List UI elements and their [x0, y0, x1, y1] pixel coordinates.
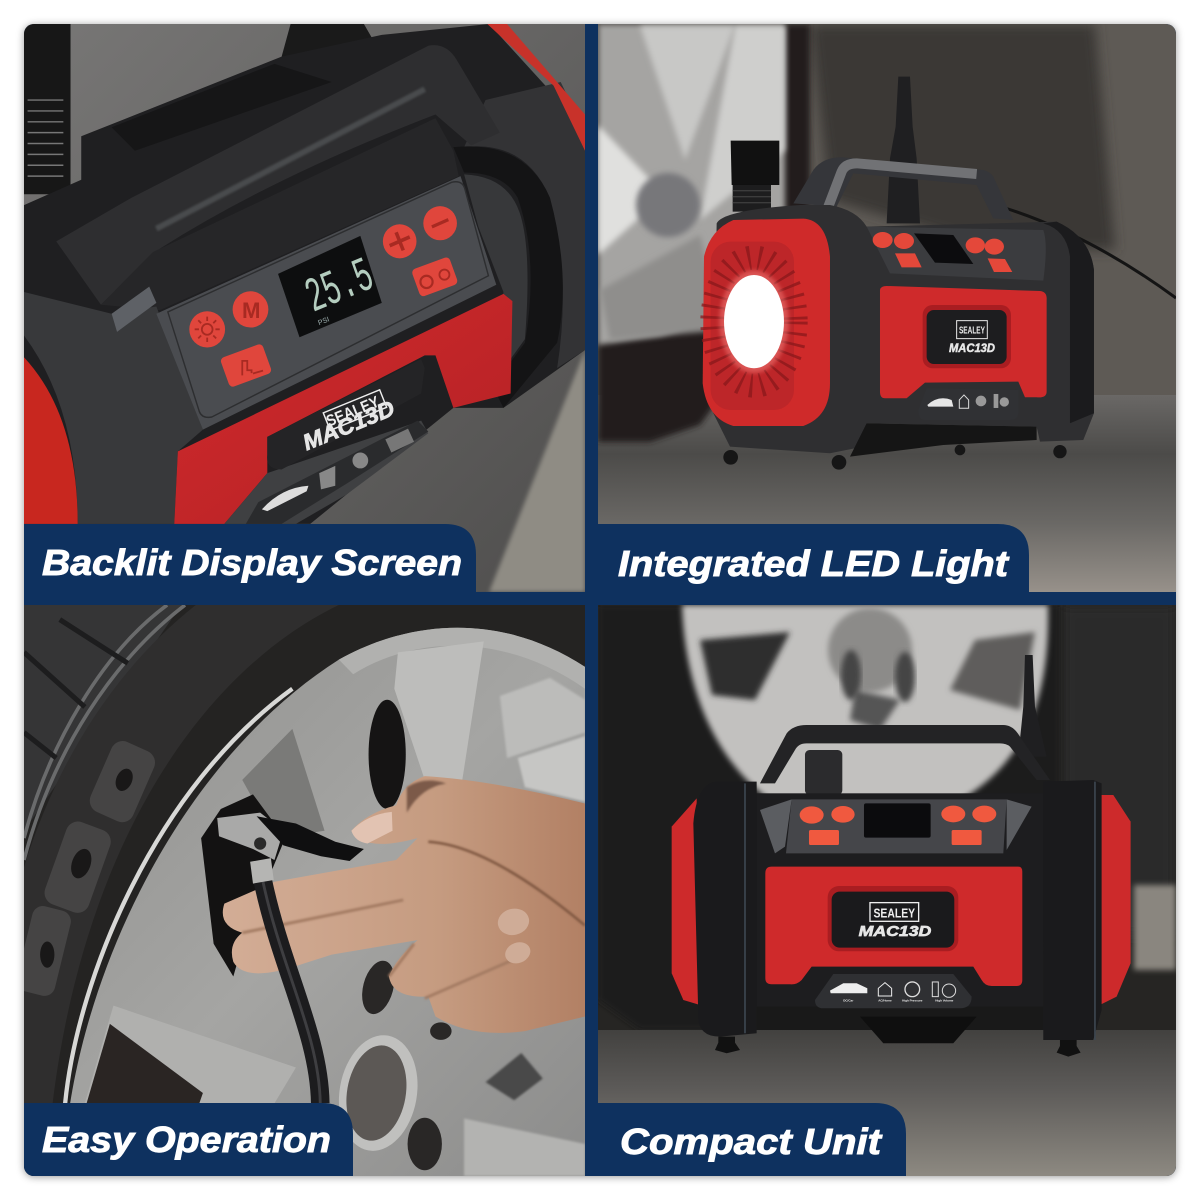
- vents: [712, 258, 796, 386]
- window dark: [201, 794, 285, 976]
- badge: MAC13D: [859, 924, 932, 940]
- panel photo: [24, 24, 585, 592]
- display: [864, 803, 931, 838]
- caption: backlit display screen: Backlit Display Screen: [42, 542, 462, 583]
- caption: integrated LED light: [598, 524, 1029, 592]
- tyre tread: [24, 605, 181, 831]
- caption: integrated LED light: Integrated LED Light: [618, 543, 1010, 584]
- thumb nail: [351, 812, 393, 844]
- sidewall lettering: [14, 737, 159, 998]
- background tyre: [810, 24, 1115, 250]
- badge: [828, 886, 958, 951]
- lower gap: [85, 1006, 296, 1103]
- feet: [723, 445, 1067, 470]
- feet: [715, 1037, 1081, 1057]
- hub ring: [330, 1029, 426, 1157]
- display: [914, 233, 973, 264]
- bottom right highlight: [464, 1119, 585, 1176]
- hand: [223, 776, 585, 1033]
- panel inset line: [168, 182, 488, 417]
- control panel: [867, 227, 1046, 281]
- control panel: [156, 176, 496, 430]
- icon strip: [918, 388, 1018, 420]
- LED lamp: [724, 275, 784, 368]
- badge: [923, 305, 1011, 368]
- fingertip shadow: [407, 781, 446, 813]
- right shoulder: [464, 82, 585, 368]
- base: [850, 423, 1037, 457]
- finger shadow: [242, 900, 525, 998]
- control panel: [786, 799, 1007, 853]
- bumper right: [1043, 780, 1102, 1040]
- badge: SEALEY: [959, 326, 985, 337]
- button symbols: M: [242, 298, 260, 323]
- panel wing: [112, 287, 156, 332]
- badge: SEALEY: [873, 905, 915, 920]
- LCD display: [278, 236, 382, 337]
- hub inner: [339, 1040, 414, 1146]
- icon strip: [246, 421, 428, 524]
- lettering holes: [40, 766, 136, 968]
- tread ribs: [24, 620, 128, 758]
- valve connector: [217, 813, 364, 884]
- red left side: [24, 357, 78, 524]
- bumper edges: [745, 782, 1095, 1040]
- wings: [760, 799, 1032, 853]
- wheel and tyre: [598, 24, 810, 442]
- icon strip: High Volume: [935, 999, 954, 1003]
- icon strip: High Pressure: [902, 999, 923, 1003]
- badge plate: [267, 388, 394, 470]
- right bumper: [453, 146, 563, 408]
- handle highlight: [828, 163, 977, 207]
- left body: [24, 292, 203, 524]
- caption: easy operation: Easy Operation: [42, 1119, 331, 1160]
- badge plate: SEALEY: [324, 393, 382, 430]
- rim highlight: [65, 689, 292, 1103]
- right spoke highlight: [518, 736, 585, 802]
- panel: integrated LED light: [598, 24, 1176, 592]
- gear: [860, 1017, 977, 1043]
- handle: [794, 158, 1009, 211]
- bumper inner: [464, 174, 528, 358]
- panel: easy operation: [14, 605, 585, 1176]
- caption: compact unit: Compact Unit: [620, 1121, 883, 1162]
- control buttons: [800, 806, 996, 845]
- floor: [598, 1030, 1176, 1176]
- hose ribbing: [263, 882, 320, 1103]
- unit artwork: [703, 77, 1094, 470]
- center body: [750, 793, 1043, 1008]
- red side right: [1093, 795, 1131, 1008]
- right gap: [500, 678, 585, 758]
- badge plate: MAC13D: [299, 395, 398, 455]
- icon strip: AC/Home: [878, 999, 892, 1003]
- side bumper: [1043, 222, 1094, 423]
- handle highlight: [156, 89, 425, 229]
- thumb crease: [428, 842, 585, 925]
- unit body: [713, 205, 1094, 453]
- nozzle: [887, 77, 920, 223]
- LCD display: 25.5: [298, 249, 382, 326]
- base: [757, 1007, 1043, 1030]
- speckled floor: [489, 350, 585, 592]
- rim outer band: [339, 628, 585, 689]
- air hose left: [24, 24, 71, 194]
- red top stripe: [487, 24, 585, 151]
- hose: [263, 882, 320, 1103]
- control buttons: [873, 232, 1012, 272]
- caption: easy operation: [24, 1103, 353, 1176]
- red fascia: [880, 286, 1047, 398]
- background light step: [1134, 885, 1176, 970]
- rear body: [24, 24, 585, 524]
- lug holes: [357, 957, 543, 1170]
- inflator hose: [731, 141, 779, 212]
- sidewall: [24, 605, 339, 1103]
- inner window: [242, 729, 325, 838]
- icon strip: [815, 974, 972, 1008]
- buttons: [189, 206, 458, 388]
- alloy wheel: [63, 628, 585, 1176]
- caption: compact unit: [598, 1103, 906, 1176]
- lower plate: [224, 421, 428, 524]
- unit artwork: [672, 655, 1131, 1057]
- upper gap: [369, 700, 406, 809]
- blurred wheel: [598, 605, 1060, 1030]
- red fascia: [765, 867, 1022, 986]
- badge: MAC13D: [949, 341, 995, 355]
- red LED housing: [703, 219, 830, 426]
- panel photo: [14, 605, 585, 1176]
- red side left: [672, 798, 700, 1005]
- caption: backlit display screen: [24, 524, 476, 605]
- nozzle: [1018, 655, 1047, 757]
- red fascia: [174, 294, 512, 524]
- bumper left: [693, 782, 757, 1037]
- carry handle: [56, 45, 500, 305]
- LCD display: PSI: [317, 314, 331, 327]
- handle interior: [138, 250, 156, 267]
- panel: compact unit: [598, 605, 1176, 1176]
- brake shadow: [87, 1024, 203, 1103]
- upper spoke: [394, 641, 484, 780]
- handle: [760, 725, 1050, 783]
- finger nails: [495, 906, 532, 938]
- background right: [1062, 605, 1176, 935]
- button symbols: [195, 220, 449, 375]
- floor: [598, 395, 1176, 592]
- air hose top: [282, 24, 372, 56]
- tread grooves: [24, 605, 185, 860]
- background wall: [598, 24, 1176, 396]
- rear recess: [112, 64, 332, 151]
- icon strip: DC/Car: [843, 999, 854, 1003]
- hose connector: [805, 750, 842, 795]
- power cable: [1005, 208, 1176, 298]
- panel: backlit display screen: [24, 24, 585, 592]
